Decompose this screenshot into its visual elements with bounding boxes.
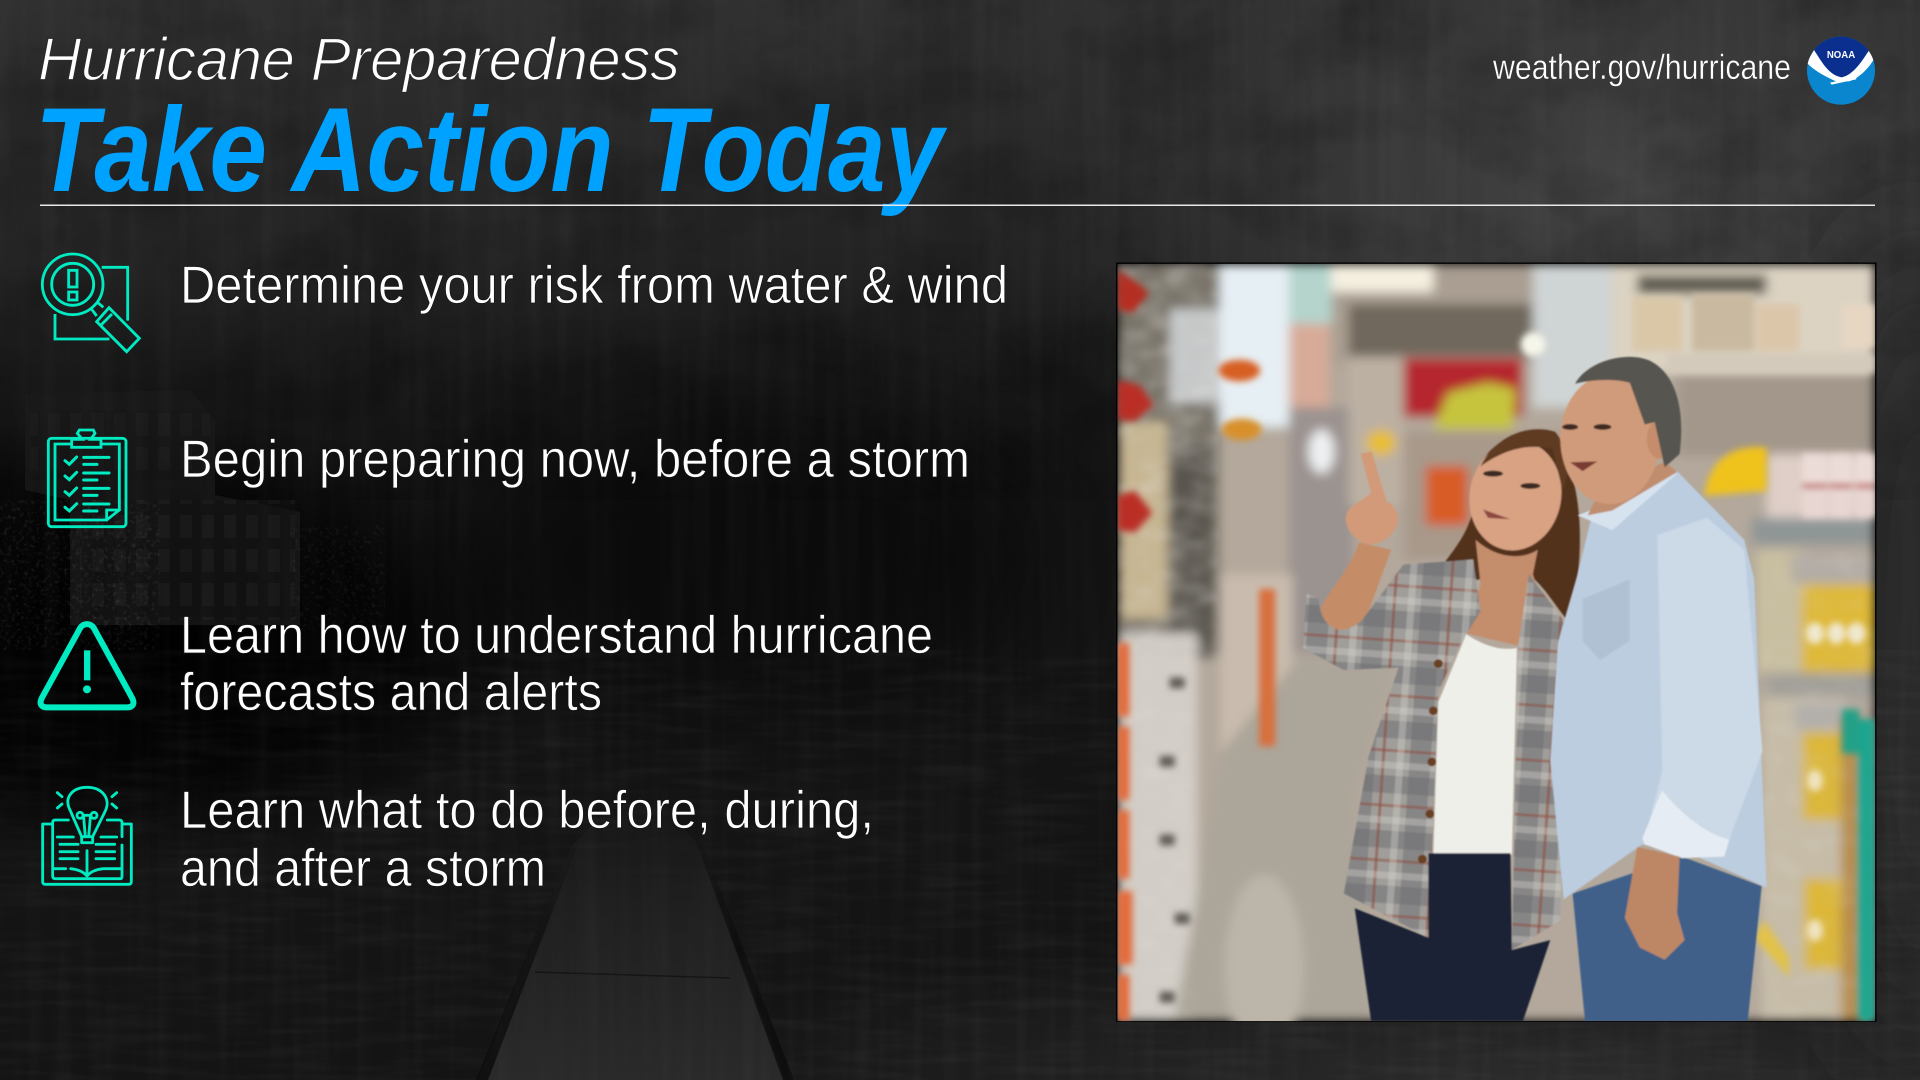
flood water — [0, 650, 1920, 1080]
man — [1550, 357, 1767, 1021]
text: forecasts and alerts: forecasts and alerts — [180, 663, 602, 722]
list item 4: learn what to do — [43, 781, 874, 898]
list item 2: begin preparing — [48, 430, 970, 527]
trees — [0, 500, 160, 650]
list item 1: determine your risk — [42, 254, 1008, 352]
title block — [35, 26, 948, 217]
website url: weather.gov/hurricane — [1492, 48, 1791, 87]
list item 3: learn forecasts — [41, 606, 933, 722]
icon: NOAA logo — [1807, 36, 1875, 105]
shelf texture — [1117, 264, 1219, 657]
header divider — [40, 204, 1875, 206]
text: forecasts and alerts — [180, 606, 933, 722]
icon: warning triangle — [41, 624, 133, 707]
text: determine: Determine your risk from water & wind — [180, 256, 1008, 315]
subtitle: Hurricane Preparedness: Hurricane Preparedness — [38, 26, 680, 93]
photo panel: couple shopping in a hardware store — [1116, 262, 1876, 1060]
text: before during after: Learn what to do before, during, — [180, 781, 874, 840]
icon: magnifier over document — [42, 254, 139, 352]
icon: light bulb over open book — [43, 787, 131, 884]
text: begin: Begin preparing now, before a storm — [180, 430, 970, 489]
woman — [1303, 429, 1580, 1021]
title: Take Action Today: Take Action Today — [35, 83, 948, 217]
text: before during after: and after a storm — [180, 839, 546, 898]
text: before during after — [180, 781, 874, 898]
text: forecasts and alerts: Learn how to understand hurricane — [180, 606, 933, 665]
icon: clipboard checklist — [48, 430, 126, 527]
icon: NOAA logo: NOAA — [1827, 50, 1855, 61]
shelf items — [1117, 270, 1875, 1021]
building — [25, 390, 300, 625]
road — [478, 790, 786, 1080]
store background — [1117, 264, 1875, 1060]
